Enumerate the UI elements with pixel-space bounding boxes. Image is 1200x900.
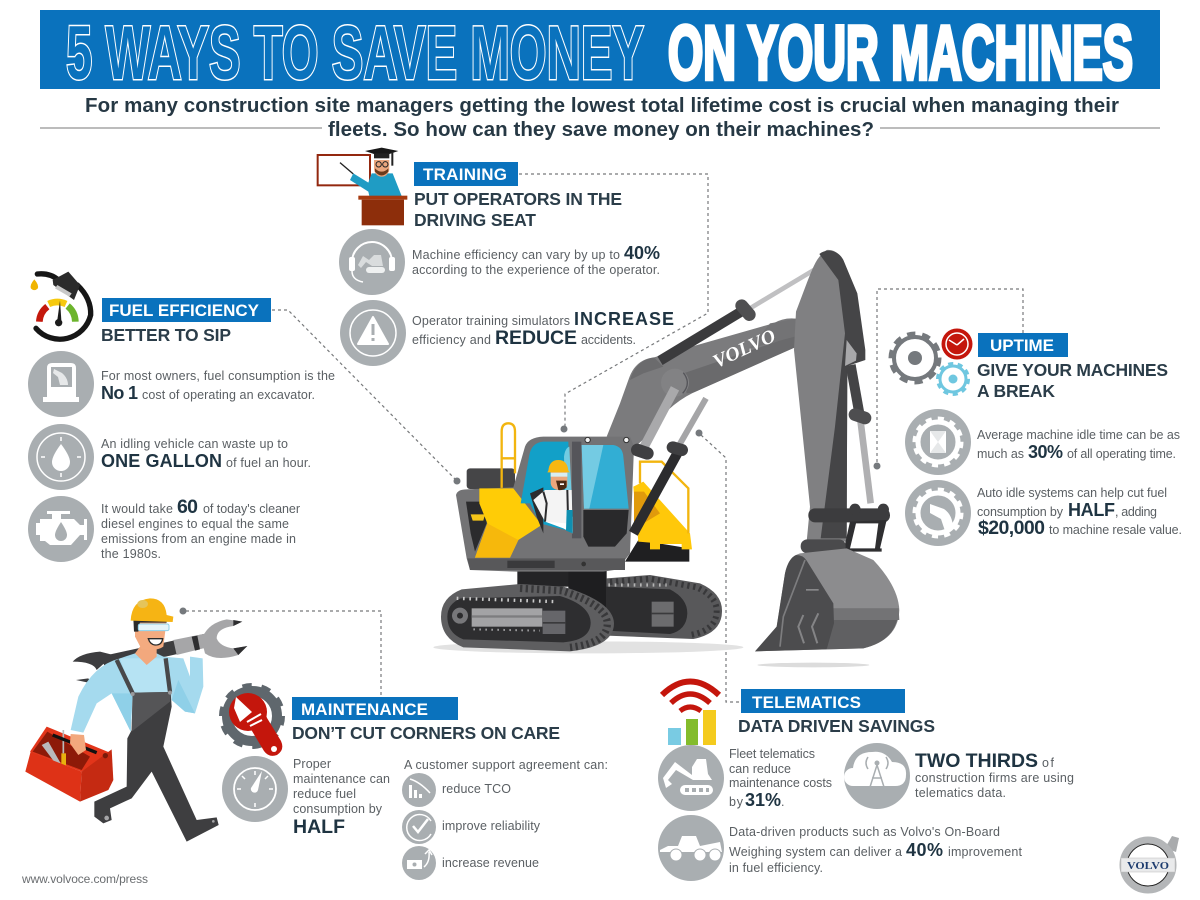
telematics text: on-board weighing: Data-driven products such as Volvo's On-Board xyxy=(729,825,1000,839)
heading: training: DRIVING SEAT xyxy=(414,210,536,230)
uptime text: 30 percent: 30% xyxy=(1028,442,1063,462)
telematics text: two thirds: of xyxy=(1042,756,1055,770)
heading: uptime: A BREAK xyxy=(977,381,1055,401)
fuel text: No 1 cost xyxy=(101,369,335,403)
training item: warning xyxy=(340,300,406,366)
maintenance text: customer support heading: A customer support agreement can: xyxy=(404,758,608,772)
excavator illustration xyxy=(433,250,899,667)
heading: uptime: UPTIME xyxy=(990,336,1054,355)
training text: increase reduce: accidents. xyxy=(581,333,636,347)
fuel text: 60 engines xyxy=(101,496,300,561)
heading: maintenance: MAINTENANCE xyxy=(301,700,428,719)
training text: increase reduce: efficiency and xyxy=(412,333,491,347)
arm xyxy=(794,250,865,542)
heading: fuel efficiency: FUEL EFFICIENCY xyxy=(109,301,260,320)
fuel text: 60 engines: 60 xyxy=(177,496,198,518)
telematics text: 31 percent xyxy=(729,747,832,810)
telematics text: on-board weighing: improvement xyxy=(948,845,1023,859)
maintenance item: increase revenue: increase revenue xyxy=(442,856,539,870)
icon: fuel nozzle gauge xyxy=(31,272,91,339)
telematics item: cloud tower xyxy=(844,743,910,809)
heading: uptime xyxy=(977,333,1168,401)
maintenance item: reduce TCO: reduce TCO xyxy=(442,782,511,796)
telematics text: on-board weighing: 40% xyxy=(906,840,943,860)
telematics text: on-board weighing: Weighing system can deliver a xyxy=(729,845,902,859)
heading: uptime: GIVE YOUR MACHINES xyxy=(977,360,1168,380)
training text: 40 percent: Machine efficiency can vary by up to xyxy=(412,248,620,262)
heading: training: TRAINING xyxy=(423,165,507,184)
uptime text: half and 20000: Auto idle systems can help cut fuel xyxy=(977,486,1167,500)
head xyxy=(131,598,173,665)
maintenance item: reduce TCO xyxy=(402,773,511,807)
uptime text: half and 20000: HALF xyxy=(1068,500,1115,520)
heading: telematics xyxy=(738,689,935,736)
training text: 40 percent: according to the experience of the operator. xyxy=(412,263,660,277)
telematics text: two thirds: TWO THIRDS xyxy=(915,750,1038,772)
upper body and cab xyxy=(456,423,634,572)
wrench xyxy=(73,619,247,683)
bucket xyxy=(755,548,899,651)
fuel text: 60 engines: emissions from an engine made in xyxy=(101,532,296,546)
volvo logo: VOLVO xyxy=(1127,860,1169,872)
training item: headset excavator xyxy=(339,229,405,295)
fuel text: 60 engines: the 1980s. xyxy=(101,547,161,561)
telematics text: two thirds xyxy=(915,750,1074,800)
illustration: mechanic with wrench and toolbox xyxy=(25,598,247,842)
maintenance item: improve reliability xyxy=(402,810,541,844)
overalls xyxy=(94,658,219,842)
uptime text: 30 percent: much as xyxy=(977,447,1024,461)
toolbox xyxy=(25,727,113,802)
maintenance item: dial xyxy=(222,756,288,822)
telematics item: excavator icon xyxy=(658,745,724,811)
maintenance text: half fuel: reduce fuel xyxy=(293,787,356,801)
heading: fuel efficiency: BETTER TO SIP xyxy=(101,325,231,345)
maintenance item: improve reliability: improve reliability xyxy=(442,819,541,833)
fuel text: 60 engines: of today's cleaner xyxy=(203,502,300,516)
fuel text: one gallon xyxy=(101,437,311,471)
heading: maintenance xyxy=(292,697,560,743)
boom and stick cylinders xyxy=(633,269,815,533)
heading: telematics: DATA DRIVEN SAVINGS xyxy=(738,716,935,736)
telematics text: 31 percent: 31% xyxy=(745,790,781,810)
telematics text: 31 percent: maintenance costs xyxy=(729,776,832,790)
uptime text: 30 percent: Average machine idle time can be as xyxy=(977,428,1180,442)
subtitle: For many construction site managers getting the lowest total lifetime cost is crucial when managing their xyxy=(85,94,1119,117)
telematics text: two thirds: telematics data. xyxy=(915,786,1006,800)
connector: fuel efficiency xyxy=(272,310,460,484)
telematics text: two thirds: construction firms are using xyxy=(915,771,1074,785)
heading: maintenance: DON’T CUT CORNERS ON CARE xyxy=(292,723,560,743)
training text: increase reduce xyxy=(412,309,674,349)
maintenance text: half fuel: HALF xyxy=(293,816,345,838)
heading: training: PUT OPERATORS IN THE xyxy=(414,189,622,209)
training text: increase reduce: Operator training simulators xyxy=(412,314,570,328)
telematics text: 31 percent: by xyxy=(729,795,744,809)
fuel text: one gallon: of fuel an hour. xyxy=(226,456,311,470)
uptime text: half and 20000: to machine resale value. xyxy=(1049,523,1182,537)
shirt xyxy=(71,653,203,733)
connector: training xyxy=(519,174,708,432)
fuel text: one gallon: ONE GALLON xyxy=(101,451,222,471)
connector: telematics xyxy=(696,430,741,702)
icon: gear with red wrench xyxy=(222,686,282,756)
heading: fuel efficiency xyxy=(101,298,271,345)
connector: maintenance xyxy=(180,608,381,697)
fuel item: gauge droplet xyxy=(28,424,94,490)
training text: increase reduce: INCREASE xyxy=(574,309,674,329)
fuel text: 60 engines: It would take xyxy=(101,502,173,516)
fuel text: No 1 cost: No 1 xyxy=(101,383,138,403)
boom: VOLVO xyxy=(710,326,779,373)
telematics item: dump truck xyxy=(658,815,724,881)
icon: wifi and bars xyxy=(662,682,719,745)
heading: telematics: TELEMATICS xyxy=(752,693,861,712)
volvo logo xyxy=(1121,836,1179,890)
telematics text: 31 percent: . xyxy=(781,795,784,809)
uptime text: 30 percent xyxy=(977,428,1180,462)
fuel item: engine xyxy=(28,496,94,562)
uptime item: hourglass gear xyxy=(905,409,971,475)
maintenance text: half fuel: consumption by xyxy=(293,802,383,816)
training text: 40 percent: 40% xyxy=(624,243,660,263)
maintenance text: half fuel: Proper xyxy=(293,757,331,771)
fuel text: No 1 cost: For most owners, fuel consumption is the xyxy=(101,369,335,383)
telematics text: 31 percent: can reduce xyxy=(729,762,791,776)
icon: gears and clock xyxy=(892,328,972,394)
uptime text: 30 percent: of all operating time. xyxy=(1067,447,1176,461)
undercarriage xyxy=(517,568,607,633)
telematics text: on-board weighing: in fuel efficiency. xyxy=(729,861,823,875)
training text: increase reduce: REDUCE xyxy=(495,327,577,349)
uptime text: half and 20000: $20,000 xyxy=(978,517,1045,539)
fuel text: No 1 cost: cost of operating an excavator. xyxy=(142,388,315,402)
fuel text: 60 engines: diesel engines to equal the same xyxy=(101,517,289,531)
front track xyxy=(441,584,614,651)
subtitle: fleets. So how can they save money on their machines? xyxy=(328,118,874,141)
cab windows xyxy=(521,437,629,547)
maintenance item: increase revenue xyxy=(402,846,539,880)
maintenance text: half fuel xyxy=(293,757,390,838)
fuel item: pump xyxy=(28,351,94,417)
subtitle xyxy=(40,94,1160,141)
training text: 40 percent xyxy=(412,243,660,277)
maintenance text: half fuel: maintenance can xyxy=(293,772,390,786)
icon: trainer at podium xyxy=(318,148,407,225)
website url: www.volvoce.com/press xyxy=(21,872,148,886)
heading: training xyxy=(414,162,622,230)
uptime text: half and 20000 xyxy=(977,486,1182,539)
connector: uptime xyxy=(874,289,1023,470)
title banner: 5 WAYS TO SAVE MONEY xyxy=(66,11,644,96)
bucket cylinder and linkage xyxy=(801,365,890,553)
uptime item: nozzle gear xyxy=(905,480,971,546)
fuel text: one gallon: An idling vehicle can waste up to xyxy=(101,437,288,451)
rear engine cover xyxy=(625,462,692,562)
rear track xyxy=(607,575,722,639)
telematics text: 31 percent: Fleet telematics xyxy=(729,747,815,761)
operator xyxy=(530,460,573,533)
telematics text: on-board weighing xyxy=(729,825,1023,875)
uptime text: half and 20000: consumption by xyxy=(977,505,1064,519)
boom xyxy=(607,318,796,448)
uptime text: half and 20000: , adding xyxy=(1115,505,1157,519)
